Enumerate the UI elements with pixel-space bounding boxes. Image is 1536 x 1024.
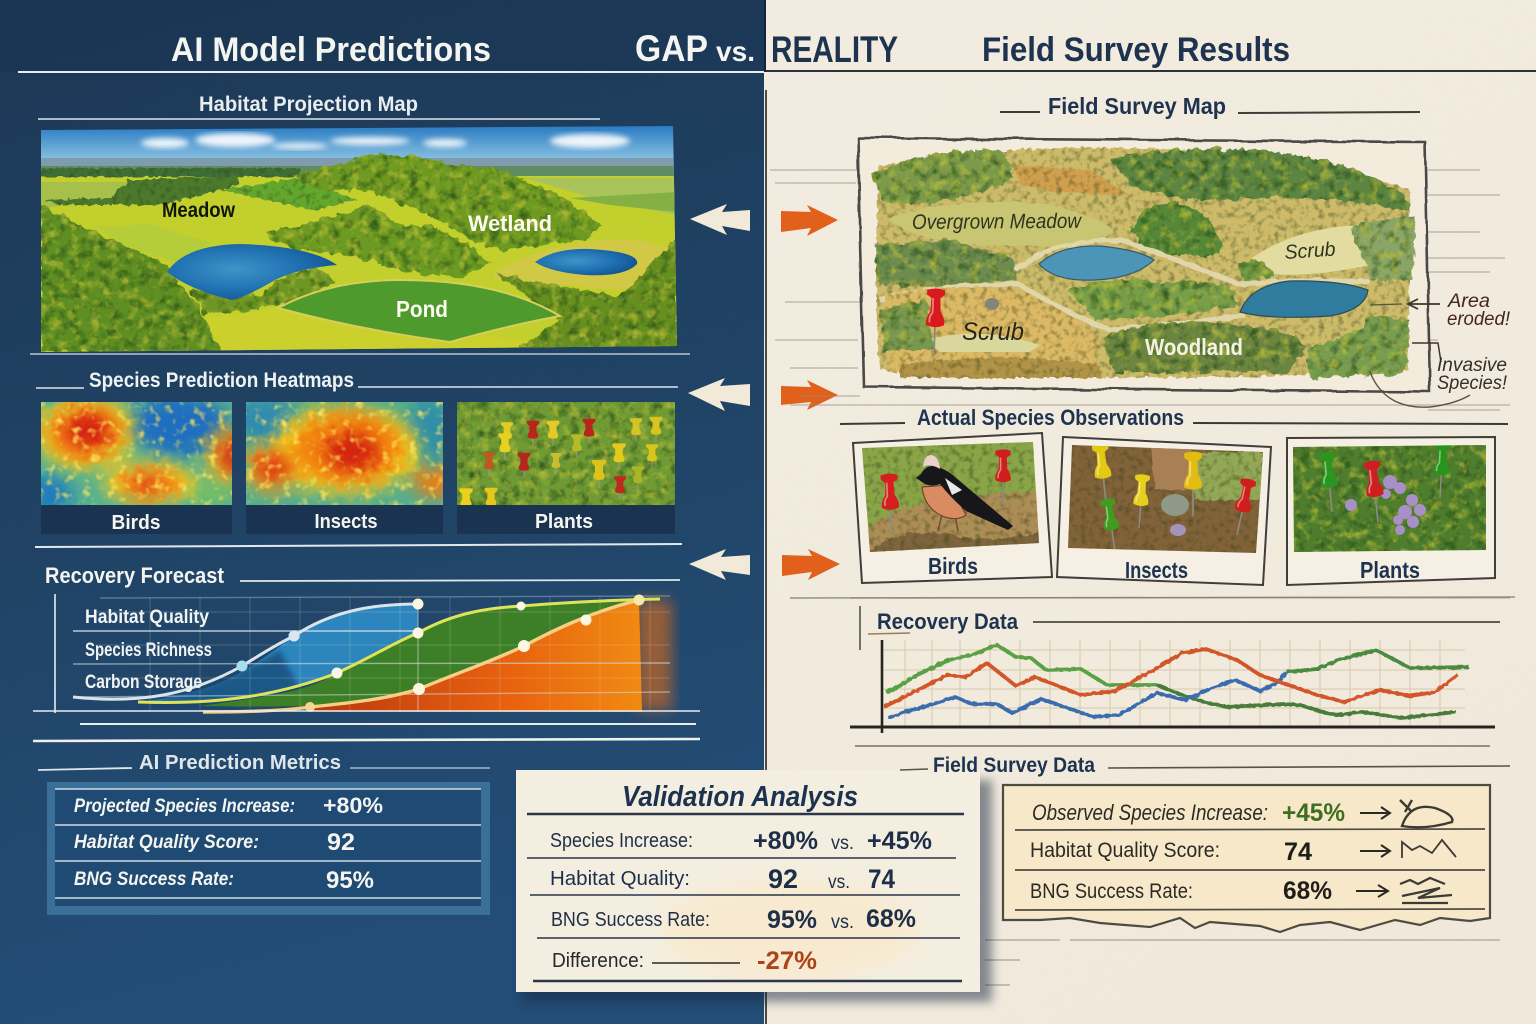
green field [278, 280, 560, 342]
arrow 1 left [690, 204, 750, 235]
row: BNG success rate: 95% [767, 906, 817, 934]
row: BNG success rate: 95% [326, 867, 374, 894]
row: habitat quality: 92 [768, 864, 798, 894]
arrows pointing right (field side) [781, 205, 840, 580]
row: habitat quality score: Habitat Quality Score: [1030, 839, 1220, 862]
map label: Meadow: Meadow [162, 199, 236, 222]
arrow 3 right [782, 549, 840, 580]
divider lines [527, 814, 964, 981]
area: habitat quality [138, 604, 418, 703]
row: BNG success rate: BNG Success Rate: [551, 909, 710, 931]
line: green late upper [1286, 650, 1469, 672]
chart grid [882, 640, 1465, 727]
page background: left navy side [0, 0, 764, 1024]
map label: Wetland: Wetland [468, 211, 552, 236]
title: Field Survey Results: Field Survey Results [982, 31, 1290, 69]
heading: Field Survey Map: Field Survey Map [1048, 93, 1226, 119]
series labels: Carbon Storage [85, 672, 202, 693]
row: habitat quality score [1030, 838, 1456, 866]
area: carbon storage [310, 600, 642, 712]
row: projected species increase: Projected Species Increase: [74, 796, 295, 817]
line: species richness [138, 599, 660, 703]
callout: area eroded: Area [1447, 291, 1490, 312]
sketch hatching behind map [770, 170, 1510, 598]
photo card: Plants [1285, 437, 1495, 585]
row: species increase: +45% [867, 827, 932, 855]
row: BNG success rate [551, 905, 916, 934]
heading: Recovery Forecast: Recovery Forecast [45, 563, 225, 588]
panel: validation analysis [516, 770, 992, 1002]
callout: invasive species: Species! [1437, 373, 1508, 394]
heatmap: Plants with pins [457, 402, 675, 534]
chart: recovery data [850, 640, 1495, 746]
row: observed species increase: Observed Species Increase: [1032, 800, 1268, 825]
yellow round small pond [495, 239, 677, 290]
lower yellow meadow [206, 309, 552, 350]
map label: Overgrown Meadow: Overgrown Meadow [912, 210, 1083, 234]
small tree hedges [880, 300, 935, 350]
overgrown meadow [888, 202, 1113, 246]
callout: invasive species: Invasive [1437, 355, 1507, 376]
pins: yellow and red [459, 417, 662, 515]
row: BNG success rate: BNG Success Rate: [74, 869, 234, 890]
pond 2 [1240, 281, 1368, 317]
heading: Actual Species Observations: Actual Species Observations [917, 405, 1184, 430]
title: GAP vs.: vs. [716, 36, 755, 67]
title: REALITY: REALITY [771, 29, 898, 70]
line: green late lower [1157, 685, 1456, 718]
central trees [1065, 280, 1238, 320]
green patch [221, 178, 358, 210]
woodland bottom [1100, 322, 1305, 372]
label strip: Plants: Plants [535, 511, 593, 533]
row: observed species increase [1032, 799, 1452, 827]
row: habitat quality score: 92 [327, 829, 355, 856]
row: species increase: Species Increase: [550, 830, 693, 852]
arrow 2 right [781, 380, 838, 410]
upper forest [291, 152, 600, 250]
photo label: Insects: Insects [1125, 557, 1188, 583]
label strip: Birds [41, 505, 232, 534]
chart axes [33, 594, 700, 724]
line: blue [888, 672, 1286, 718]
hatch below photos [790, 597, 1515, 598]
label strip: Plants [457, 505, 675, 534]
photo label: Birds: Birds [928, 553, 978, 579]
row: BNG success rate [1030, 877, 1452, 905]
pin: red right [995, 449, 1011, 505]
label strip: Insects: Insects [314, 511, 378, 533]
chart: recovery forecast [33, 594, 700, 724]
callout: area eroded [1370, 291, 1511, 330]
mid tree band [266, 205, 490, 278]
photo card: Birds [853, 433, 1052, 583]
red pin [925, 288, 945, 354]
row: projected species increase [74, 793, 383, 818]
right forest [493, 240, 677, 352]
row: habitat quality score [74, 829, 355, 856]
left forest [41, 205, 222, 352]
pins: green and red [1318, 442, 1451, 523]
row: BNG success rate [74, 867, 374, 894]
field base [41, 176, 677, 356]
row: species increase: +80% [753, 827, 818, 855]
map label: Scrub right: Scrub [1284, 238, 1336, 264]
line: habitat quality [73, 604, 418, 699]
row: difference: -27% [757, 947, 817, 975]
validation title: Validation Analysis [622, 781, 858, 813]
sketch strokes under field data [985, 940, 1500, 985]
label strip: Insects [246, 505, 443, 534]
heatmap: Birds [41, 402, 232, 534]
series labels: Habitat Quality [85, 607, 209, 628]
arrow 1 right [781, 205, 838, 236]
panel: habitat projection map [41, 126, 677, 356]
trees clump centre [1130, 203, 1221, 255]
panel: field survey data [1003, 785, 1490, 932]
pond 1 [1039, 246, 1154, 280]
ochre top patch [1015, 165, 1130, 195]
row: species increase: vs. [831, 833, 854, 854]
heatmap: Insects [246, 402, 443, 534]
map label: Scrub left: Scrub [962, 318, 1024, 346]
label strip: Birds: Birds [112, 512, 160, 534]
row: habitat quality: Habitat Quality: [550, 868, 690, 890]
wide pond [167, 244, 337, 300]
row: difference [552, 947, 817, 975]
callout: area eroded: eroded! [1447, 309, 1511, 330]
heading: Field Survey Data: Field Survey Data [933, 754, 1095, 777]
pin: red left [880, 473, 901, 535]
back hedge [43, 176, 240, 205]
row: habitat quality [550, 864, 895, 894]
row: BNG success rate: 68% [866, 905, 916, 933]
panel: field survey map [858, 138, 1430, 392]
callout: invasive species [1370, 343, 1508, 407]
gridlines [73, 596, 670, 697]
map label: Pond: Pond [396, 296, 448, 322]
row: projected species increase: +80% [323, 793, 383, 818]
line: green early [886, 645, 1157, 692]
line: orange [884, 649, 1458, 707]
photo label: Plants: Plants [1360, 557, 1420, 583]
row: habitat quality: 74 [868, 864, 895, 894]
bottom right trees [1305, 315, 1410, 378]
row: habitat quality: vs. [828, 872, 850, 893]
pins: yellow green red [1091, 443, 1257, 553]
forecast glow [636, 600, 672, 710]
row: BNG success rate: BNG Success Rate: [1030, 880, 1193, 903]
map base [876, 148, 1410, 378]
heading: Species Prediction Heatmaps: Species Prediction Heatmaps [89, 369, 354, 392]
woodland top right [1110, 149, 1410, 212]
data points [236, 594, 644, 712]
arrow 2 left [688, 378, 750, 411]
left tree belt [875, 240, 1015, 288]
row: difference: Difference: [552, 950, 644, 972]
chart axes [850, 640, 1495, 746]
line: carbon storage [203, 600, 639, 712]
scrub right pale [1252, 225, 1370, 275]
arrows pointing left (AI side) [688, 204, 750, 580]
panel: AI prediction metrics [47, 782, 490, 915]
pale scrub [885, 287, 1098, 372]
row: species increase [550, 827, 932, 855]
row: observed species increase: +45% [1282, 799, 1345, 827]
title: AI Model Predictions: AI Model Predictions [171, 31, 491, 69]
row: BNG success rate: 68% [1283, 877, 1332, 905]
right side trees [1350, 215, 1415, 280]
photo card: Insects [1057, 437, 1271, 585]
small pond [535, 249, 637, 275]
woodland top left [872, 150, 1015, 205]
row: BNG success rate: vs. [831, 912, 854, 933]
title: GAP vs.: GAP [635, 28, 708, 69]
purple flowers [1345, 475, 1426, 535]
heading: Recovery Data: Recovery Data [877, 609, 1019, 634]
bird [916, 455, 1013, 531]
heading: Habitat Projection Map: Habitat Projection Map [199, 93, 418, 116]
map label: Woodland: Woodland [1145, 334, 1243, 360]
trees under pond [190, 268, 335, 315]
clouds [141, 133, 630, 149]
paths [880, 240, 1370, 330]
arrow 3 left [689, 549, 750, 580]
area: species richness [200, 600, 639, 707]
row: habitat quality score: Habitat Quality Score: [74, 832, 259, 853]
series labels: Species Richness [85, 640, 212, 661]
heading: AI Prediction Metrics: AI Prediction Metrics [139, 752, 341, 774]
series labels [85, 607, 212, 693]
row: habitat quality score: 74 [1284, 838, 1312, 866]
